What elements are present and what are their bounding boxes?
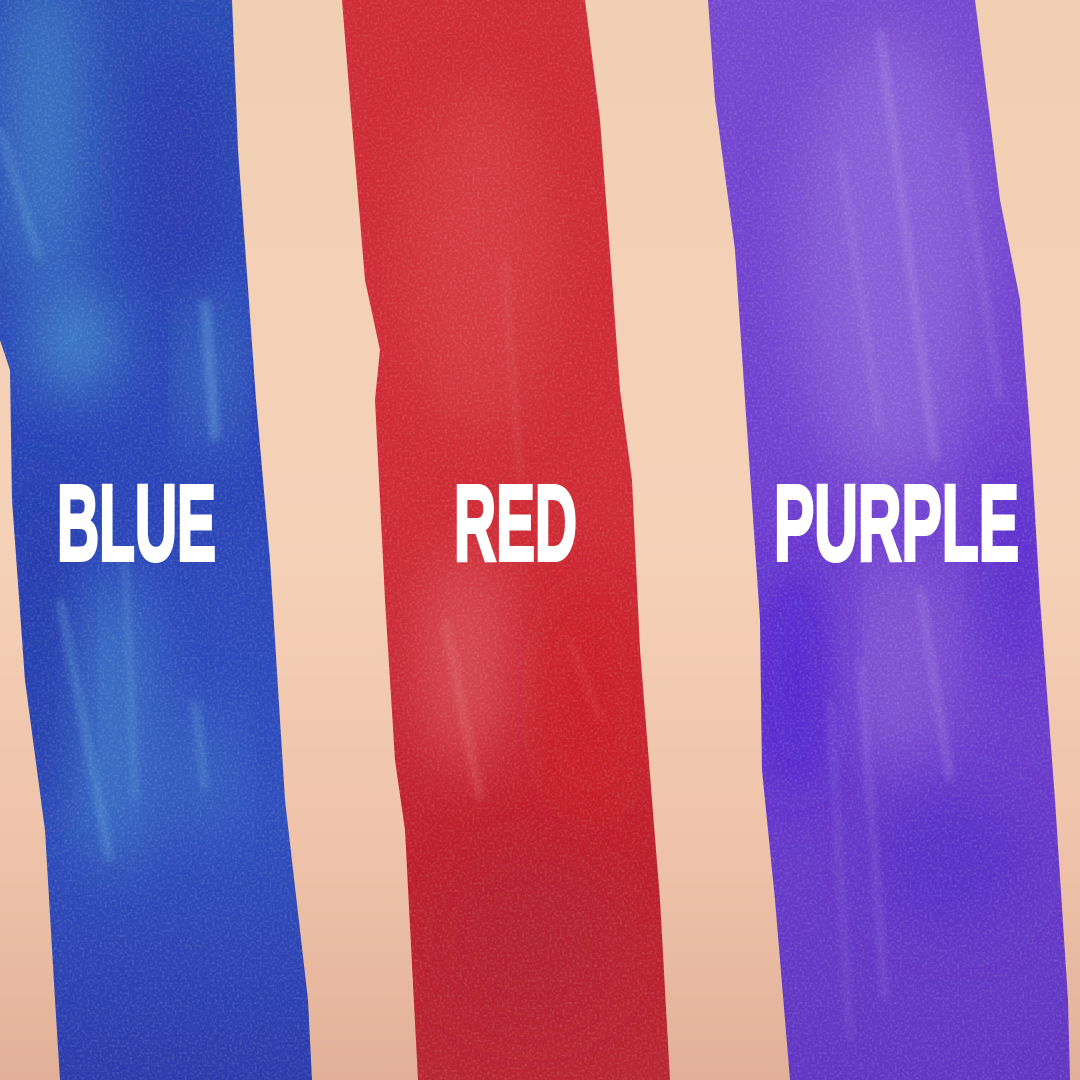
swatch: red: [340, 0, 675, 1080]
streaks: blue: [0, 130, 215, 860]
label: RED: RED: [454, 462, 577, 583]
streaks: red: [442, 385, 600, 800]
swatch: purple: [700, 0, 1080, 1080]
label: BLUE: BLUE: [57, 462, 216, 583]
streaks: purple: [830, 30, 1000, 1040]
swatch: blue: [0, 0, 320, 1080]
